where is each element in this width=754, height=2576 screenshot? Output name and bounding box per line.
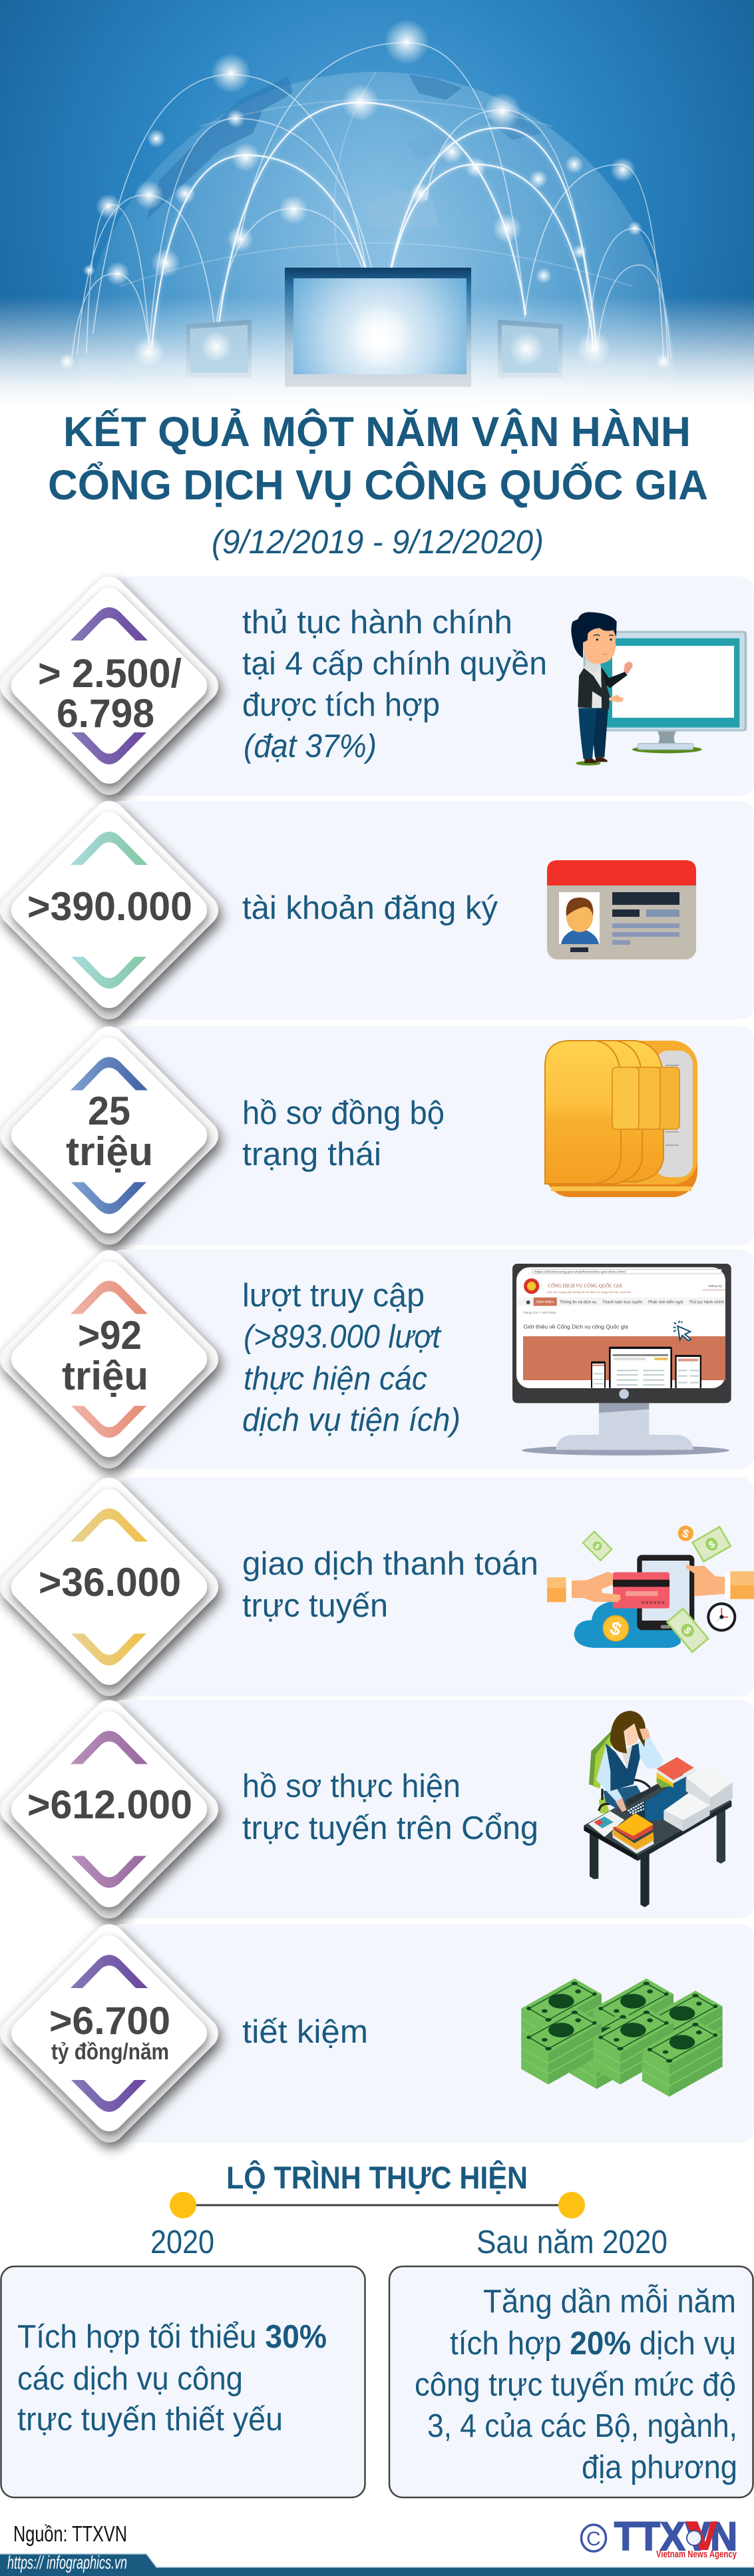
box: after 2020 target: tích hợp 20% dịch vụ bbox=[450, 2326, 736, 2362]
stat diamond bbox=[0, 794, 225, 1026]
panel: portal visits bbox=[0, 1244, 754, 1475]
icon: folders bbox=[545, 1041, 697, 1197]
description: tài khoản đăng ký bbox=[242, 890, 498, 926]
logo: TTXVN: C bbox=[586, 2528, 601, 2550]
stat diamond: >6.700 bbox=[49, 1999, 170, 2043]
description: hồ sơ đồng bộ bbox=[242, 1095, 445, 1131]
box: 2020 target: trực tuyến thiết yếu bbox=[17, 2402, 283, 2438]
icon: card payment bbox=[547, 1525, 754, 1652]
left monitor bbox=[186, 320, 252, 378]
description: được tích hợp bbox=[242, 687, 440, 723]
description: thực hiện các bbox=[244, 1361, 427, 1397]
icon: desktop showing portal: Thông tin và dịch vụ bbox=[560, 1300, 596, 1304]
subtitle: date range: (9/12/2019 - 9/12/2020) bbox=[212, 523, 544, 561]
title bbox=[48, 408, 708, 509]
stat diamond bbox=[0, 1020, 225, 1251]
roadmap label: after 2020: Sau năm 2020 bbox=[476, 2224, 667, 2260]
icon: desktop showing portal: Giới thiệu bbox=[536, 1300, 554, 1304]
description: hồ sơ thực hiện bbox=[242, 1768, 461, 1804]
description bbox=[242, 1768, 538, 1846]
title: CỔNG DỊCH VỤ CÔNG QUỐC GIA bbox=[48, 461, 708, 509]
icon: woman working at desk bbox=[584, 1710, 733, 1908]
stat diamond bbox=[0, 1918, 225, 2149]
description bbox=[242, 1278, 461, 1438]
description: giao dịch thanh toán bbox=[242, 1546, 538, 1582]
source: Nguồn: TTXVN bbox=[13, 2521, 127, 2546]
stat diamond bbox=[0, 1694, 225, 1925]
icon: card payment: $ bbox=[593, 1542, 601, 1551]
description: (>893.000 lượt bbox=[244, 1319, 442, 1355]
stat diamond bbox=[0, 1471, 225, 1702]
stat diamond bbox=[0, 570, 225, 802]
panel: synchronised records bbox=[0, 1020, 754, 1251]
description: trực tuyến bbox=[242, 1588, 388, 1624]
logo: TTXVN: TTXVN bbox=[614, 2514, 737, 2559]
icon: desktop showing portal: https://dichvucong.gov.vn/p/home/dvc-gioi-thieu.html bbox=[534, 1270, 626, 1273]
stat diamond: >390.000 bbox=[27, 884, 192, 929]
icon: presenter with screen bbox=[571, 612, 747, 766]
panel: online payments bbox=[0, 1471, 754, 1702]
icon: desktop showing portal: Trang chủ > Giới thiệu bbox=[523, 1310, 556, 1314]
network arcs bbox=[72, 43, 671, 358]
stat diamond: 6.798 bbox=[57, 691, 154, 736]
section heading: roadmap: LỘ TRÌNH THỰC HIỆN bbox=[226, 2160, 528, 2195]
description: (đạt 37%) bbox=[244, 728, 377, 764]
stat diamond: tỷ đồng/năm bbox=[51, 2039, 169, 2065]
icon: desktop showing portal: Đăng ký bbox=[709, 1284, 723, 1288]
icon: desktop showing portal: Phản ánh kiến nghị bbox=[648, 1300, 683, 1304]
stat diamond: 25 bbox=[88, 1089, 130, 1133]
icon: desktop showing portal: Thủ tục hành chính bbox=[689, 1300, 724, 1304]
description bbox=[242, 605, 547, 764]
icon: desktop showing portal: Giới thiệu về Cổng Dịch vụ công Quốc gia bbox=[524, 1323, 628, 1330]
stat diamond: triệu bbox=[66, 1129, 153, 1174]
glowing nodes bbox=[59, 19, 671, 370]
icon: stacks of banknotes bbox=[521, 1979, 723, 2097]
stat diamond: > 2.500/ bbox=[38, 651, 182, 696]
stat diamond: >36.000 bbox=[39, 1560, 181, 1605]
stat diamond: >612.000 bbox=[27, 1782, 192, 1827]
box: after 2020 target: Tăng dần mỗi năm bbox=[483, 2284, 736, 2320]
description: dịch vụ tiện ích) bbox=[242, 1402, 461, 1438]
icon: desktop showing portal bbox=[512, 1264, 731, 1455]
box: 2020 target: các dịch vụ công bbox=[17, 2361, 243, 2397]
footer band with website bbox=[0, 2552, 754, 2576]
box: after 2020 target: công trực tuyến mức độ bbox=[415, 2367, 736, 2403]
description: tại 4 cấp chính quyền bbox=[242, 646, 547, 682]
central monitor bbox=[285, 268, 471, 387]
icon: card payment: $ bbox=[707, 1539, 717, 1551]
box: after 2020 target bbox=[389, 2266, 753, 2497]
footer band with website: https:// infographics.vn bbox=[7, 2552, 127, 2573]
stat diamond: triệu bbox=[62, 1354, 148, 1398]
icon: desktop showing portal: CỔNG DỊCH VỤ CÔNG QUỐC GIA bbox=[548, 1283, 622, 1288]
description: thủ tục hành chính bbox=[242, 605, 512, 641]
description: trạng thái bbox=[242, 1137, 381, 1172]
right monitor bbox=[498, 320, 562, 378]
icon: card payment: $ bbox=[680, 1526, 691, 1541]
box: after 2020 target: địa phương bbox=[582, 2449, 737, 2485]
icon: desktop showing portal: Kết nối, cung cấp thông tin và dịch vụ công mọi lúc, mọi nơi bbox=[547, 1290, 631, 1294]
description: trực tuyến trên Cổng bbox=[242, 1810, 538, 1846]
stat diamond bbox=[0, 1244, 225, 1475]
roadmap timeline bbox=[170, 2192, 585, 2218]
icon: desktop showing portal: Thanh toán trực tuyến bbox=[602, 1300, 642, 1304]
panel: annual savings bbox=[0, 1918, 754, 2149]
icon: ID card bbox=[547, 860, 696, 959]
globe bbox=[80, 72, 673, 377]
description bbox=[242, 1546, 538, 1624]
box: 2020 target bbox=[1, 2266, 365, 2497]
panel: administrative procedures bbox=[0, 570, 754, 802]
roadmap label: 2020: 2020 bbox=[150, 2224, 214, 2260]
description bbox=[242, 1095, 445, 1172]
icon: card payment: $ bbox=[681, 1625, 693, 1637]
stat diamond: >92 bbox=[78, 1313, 142, 1358]
panel: registered accounts bbox=[0, 794, 754, 1026]
title: KẾT QUẢ MỘT NĂM VẬN HÀNH bbox=[63, 408, 691, 455]
description: lượt truy cập bbox=[242, 1278, 425, 1314]
description: tiết kiệm bbox=[242, 2014, 368, 2050]
icon: card payment: $ bbox=[608, 1617, 624, 1641]
panel: online dossiers bbox=[0, 1694, 754, 1925]
box: 2020 target: Tích hợp tối thiểu 30% bbox=[17, 2319, 327, 2355]
hero: globe and connected monitors bbox=[0, 0, 754, 397]
